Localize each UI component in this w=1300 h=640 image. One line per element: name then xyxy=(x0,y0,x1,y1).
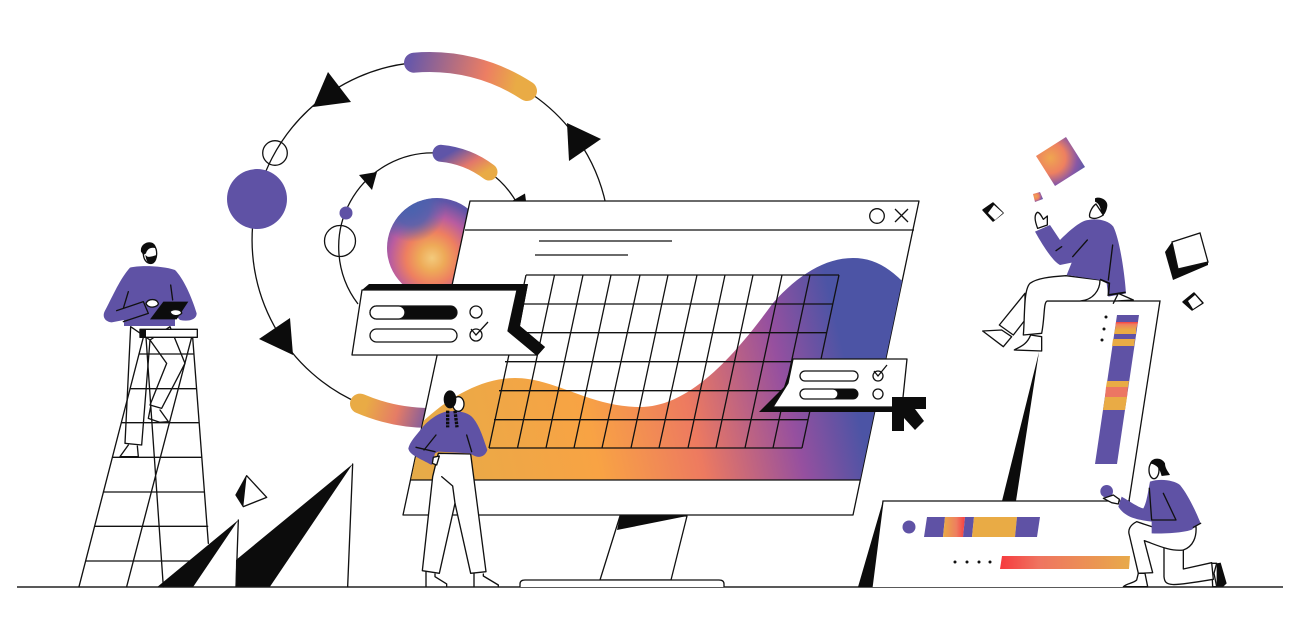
checked circle xyxy=(470,322,488,341)
back leg xyxy=(999,293,1025,335)
person: seated man xyxy=(983,198,1133,351)
open ring on inner orbit xyxy=(324,226,356,256)
gradient arc: inner xyxy=(441,153,489,172)
toggle bar empty xyxy=(800,371,858,381)
raised leg xyxy=(150,327,185,408)
arrowhead: right xyxy=(567,123,601,161)
floating cube large right xyxy=(1165,233,1208,280)
ladder xyxy=(79,329,208,587)
ground line xyxy=(17,586,1283,588)
small purple dot xyxy=(340,206,352,220)
person: woman with braids xyxy=(408,390,498,587)
clipboard xyxy=(150,302,188,319)
header lines xyxy=(535,241,672,255)
floating cube small right xyxy=(1183,293,1203,310)
chart grid xyxy=(489,275,839,448)
purple planet xyxy=(227,169,287,229)
segmented bar xyxy=(924,517,1040,537)
gradient sphere xyxy=(387,198,487,298)
back foot xyxy=(983,330,1012,347)
floating cube left xyxy=(983,203,1003,221)
head xyxy=(1149,459,1170,479)
sweater xyxy=(104,266,197,326)
head xyxy=(1090,198,1107,218)
gradient arc: bottom xyxy=(360,404,430,418)
toggle bar filled xyxy=(370,306,457,319)
gradient arc: top xyxy=(414,62,527,91)
arrowhead: lower left xyxy=(259,318,293,355)
inner orbit xyxy=(324,153,526,304)
radio circle xyxy=(470,306,482,318)
window controls xyxy=(870,209,908,223)
toggle bar empty xyxy=(370,329,457,342)
small spike xyxy=(158,520,238,587)
toggle bar filled xyxy=(800,389,858,399)
arrowhead: inner right xyxy=(512,194,526,201)
lower foot xyxy=(120,445,138,457)
ball xyxy=(1100,485,1113,498)
sweater xyxy=(1118,480,1201,533)
chart wave xyxy=(405,258,915,480)
open ring on outer orbit xyxy=(263,141,287,165)
pyramid xyxy=(236,476,267,507)
thigh xyxy=(1129,522,1196,573)
base panel xyxy=(858,501,1130,587)
sweater xyxy=(1035,219,1126,297)
front foot xyxy=(1123,573,1148,587)
tower panel xyxy=(1002,301,1160,501)
dotted row xyxy=(955,560,990,564)
feet xyxy=(426,572,498,587)
gradient bar xyxy=(1000,556,1130,569)
hand at hip xyxy=(432,456,439,465)
hands xyxy=(146,300,182,316)
front foot xyxy=(1014,335,1042,351)
head xyxy=(444,390,464,427)
arrowhead: top xyxy=(313,72,351,107)
arrowhead: inner left xyxy=(359,172,377,190)
triangles foreground xyxy=(158,464,353,587)
popup: right settings card xyxy=(759,359,907,412)
monitor base xyxy=(520,580,724,587)
checked circle xyxy=(873,365,887,381)
raised foot xyxy=(148,407,168,422)
tower stripe bar xyxy=(1095,315,1139,464)
trousers xyxy=(422,453,486,573)
monitor xyxy=(403,201,919,515)
person: man on ladder xyxy=(79,242,208,587)
standing leg xyxy=(125,327,150,445)
popup: left settings card xyxy=(352,284,545,356)
outer orbit xyxy=(227,62,606,418)
trousers xyxy=(1023,276,1100,335)
cursor arrow xyxy=(892,397,926,431)
resting hand xyxy=(1113,293,1133,303)
head xyxy=(141,242,157,264)
floating gradient cube small xyxy=(1033,192,1043,202)
back foot xyxy=(1212,563,1227,587)
floating gradient cube large xyxy=(1036,137,1085,186)
monitor stand xyxy=(520,516,724,587)
sweater xyxy=(408,411,487,465)
person: kneeling man with ball xyxy=(1100,459,1227,587)
radio circle xyxy=(873,389,883,399)
trailing leg xyxy=(1164,540,1213,585)
hand xyxy=(1103,495,1119,504)
tower dots xyxy=(1102,317,1106,340)
purple dot xyxy=(902,520,916,534)
large spike xyxy=(236,464,353,587)
raised hand xyxy=(1035,212,1047,228)
